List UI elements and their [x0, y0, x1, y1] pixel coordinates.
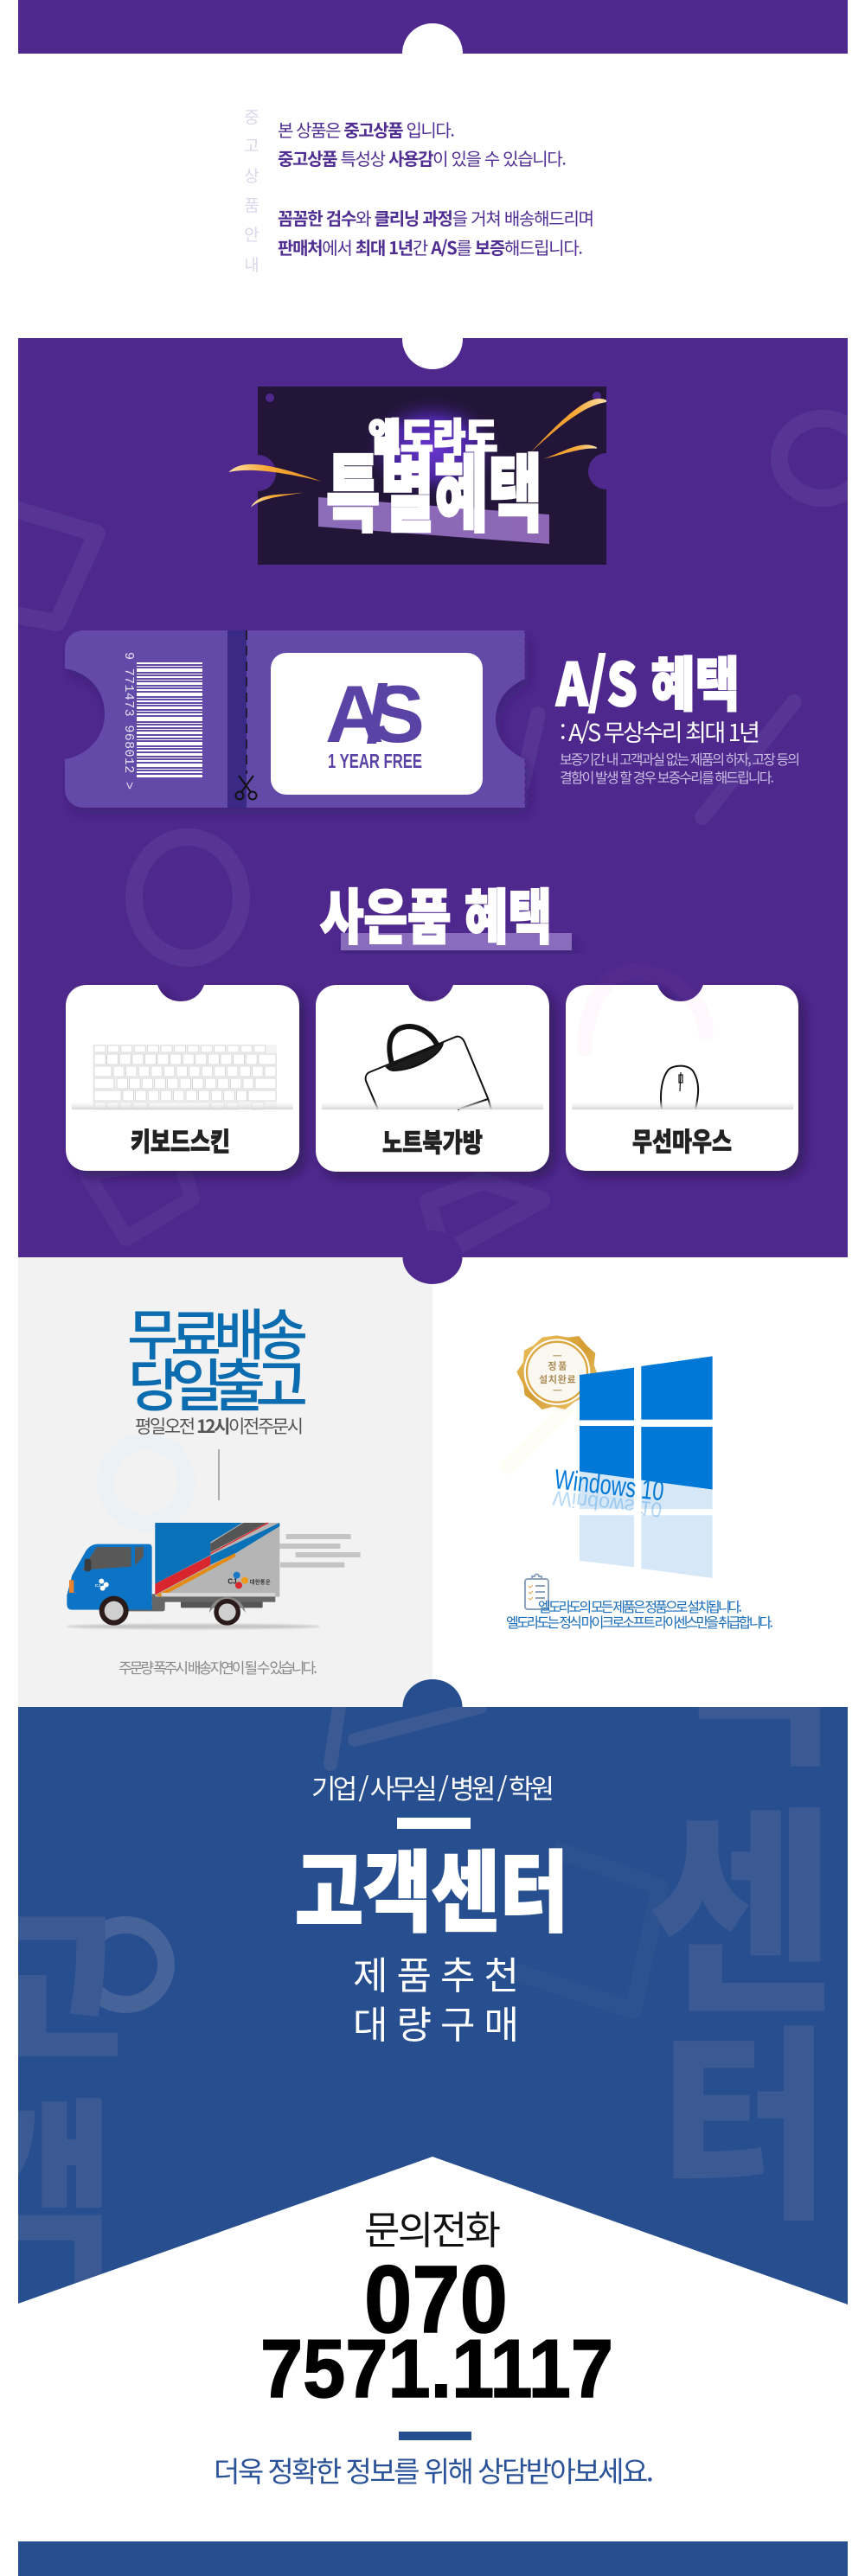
audience line: 기업 / 사무실 / 병원 / 학원	[311, 1767, 554, 1806]
A/S benefit text: 보증기간 내 고객과실 없는 제품의 하자, 고장 등의	[560, 748, 800, 769]
CJ mark on cab	[99, 1579, 109, 1591]
vertical label: used product guide: 내	[244, 252, 260, 276]
mouse illustration	[661, 1066, 698, 1109]
gold seal: 정품	[548, 1358, 567, 1372]
A/S benefit text: : A/S 무상수리 최대 1년	[560, 714, 760, 748]
bottom band	[18, 2541, 848, 2576]
heading: free same-day shipping: 당일출고	[128, 1340, 308, 1423]
barcode	[121, 652, 202, 789]
gift card: wireless mouse	[566, 985, 798, 1171]
background giant lettering: 터	[659, 1961, 830, 2261]
icon: scissors	[235, 776, 256, 799]
Windows 10 wordmark: Windows 10	[553, 1463, 665, 1506]
icon: clipboard	[525, 1574, 548, 1609]
vertical label: used product guide: 중	[244, 105, 260, 128]
notice text	[278, 117, 594, 259]
barcode: 9 771473 968012 >	[121, 652, 136, 789]
wheels	[209, 1597, 246, 1613]
services	[353, 1945, 519, 2049]
services: 대량구매	[353, 1994, 519, 2049]
consultation note: 더욱 정확한 정보를 위해 상담받아보세요.	[214, 2449, 654, 2490]
banner: special benefits	[228, 387, 625, 565]
A/S benefit text: A/S 혜택	[555, 637, 740, 723]
customer center panel	[18, 1679, 848, 2576]
top purple band	[18, 0, 848, 84]
background giant lettering: 객	[666, 1507, 835, 1807]
gold seal	[516, 1335, 598, 1409]
label: 무선마우스	[632, 1121, 732, 1159]
genuine Windows 10 graphic	[506, 1335, 773, 1632]
contact phone: 7571.1117	[260, 2323, 613, 2415]
label: 키보드스킨	[131, 1121, 230, 1159]
Windows 10 wordmark	[552, 1463, 665, 1522]
label: 노트북가방	[382, 1122, 483, 1160]
background giant lettering	[18, 1707, 824, 2283]
genuine license note: 엘도라도는 정식 마이크로소프트 라이센스만을 취급합니다.	[506, 1611, 773, 1632]
windows logo	[580, 1356, 713, 1578]
shipping delay note: 주문량 폭주시 배송지연이 될 수 있습니다.	[119, 1656, 317, 1678]
banner title: 특별혜택	[326, 426, 542, 549]
vertical label: used product guide	[244, 105, 260, 276]
A/S benefit text	[555, 637, 800, 787]
gift card: laptop bag	[316, 985, 549, 1172]
Windows 10 wordmark: Windows 10	[552, 1486, 663, 1522]
banner title: 엘도라도	[368, 406, 497, 462]
ticket card: A/S 1 year free	[271, 653, 483, 795]
truck illustration	[67, 1523, 361, 1629]
ticket card: A/S 1 year free: A/S	[325, 668, 425, 759]
notice text: 중고상품 특성상 사용감이 있을 수 있습니다.	[278, 145, 567, 170]
banner title	[326, 406, 542, 549]
gift benefit heading: 사은품 혜택	[320, 869, 552, 956]
CJ logistics logo: CJ	[227, 1578, 237, 1586]
vertical label: used product guide: 고	[244, 133, 260, 157]
truck illustration: CJ	[95, 1583, 100, 1588]
gold seal: 설치완료	[539, 1372, 576, 1386]
contact phone: 문의전화	[364, 2199, 501, 2255]
notice section	[244, 105, 594, 276]
title: customer center: 고객센터	[295, 1823, 568, 1950]
vertical label: used product guide: 품	[244, 193, 260, 216]
A/S benefit text: 결함이 발생 할 경우 보증수리를 해드립니다.	[560, 766, 774, 787]
notice text: 꼼꼼한 검수와 클리닝 과정을 거쳐 배송해드리며	[278, 205, 594, 230]
speed lines	[274, 1534, 361, 1568]
vertical label: used product guide: 안	[244, 222, 260, 246]
bag illustration	[366, 1026, 491, 1109]
ticket card: A/S 1 year free: 1 YEAR FREE	[328, 750, 422, 772]
contact phone	[260, 2199, 613, 2415]
white contact panel	[18, 2157, 848, 2541]
notice text: 본 상품은 중고상품 입니다.	[278, 117, 455, 142]
genuine license note	[506, 1595, 773, 1632]
genuine license note: 엘도라도의 모든 제품은 정품으로 설치됩니다.	[538, 1595, 742, 1616]
A/S ticket	[65, 630, 526, 808]
gold streaks	[228, 399, 606, 508]
CJ logistics logo: 대한통운	[250, 1577, 271, 1585]
notice text: 판매처에서 최대 1년간 A/S를 보증해드립니다.	[278, 234, 583, 259]
purple benefits panel	[18, 309, 865, 1257]
CJ logistics logo	[227, 1572, 271, 1588]
ticket perforation	[524, 632, 528, 806]
order cutoff note: 평일오전 12시이전주문시	[135, 1413, 304, 1439]
heading: free same-day shipping	[127, 1292, 308, 1423]
gift card: keyboard skin	[66, 985, 299, 1171]
heading: free same-day shipping: 무료배송	[127, 1292, 308, 1371]
delivery panel	[18, 1230, 848, 1707]
services: 제품추천	[353, 1945, 519, 2000]
contact phone: 070	[364, 2247, 508, 2353]
cab	[67, 1544, 152, 1610]
keyboard illustration	[93, 1045, 277, 1109]
background giant lettering: 센	[649, 1738, 836, 2057]
vertical label: used product guide: 상	[244, 163, 260, 187]
